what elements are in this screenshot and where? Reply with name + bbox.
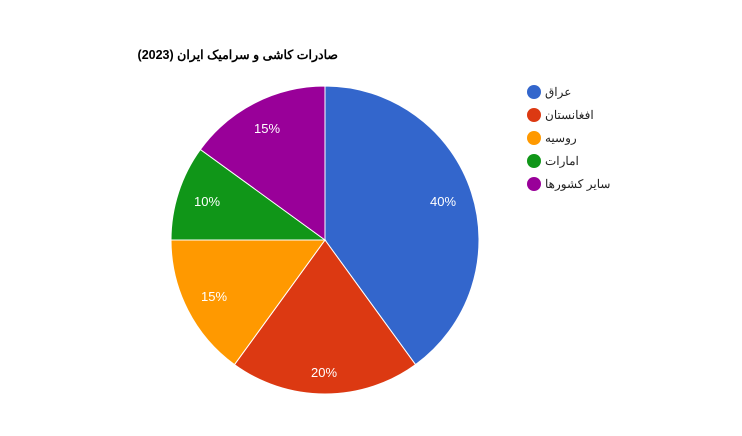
title: صادرات کاشی و سرامیک ایران (2023) [138, 48, 338, 63]
pie chart [171, 86, 479, 394]
legend item: Russia: روسیه [545, 131, 577, 145]
slice: Iraq 40% [325, 86, 479, 365]
slice labels: 40% [430, 194, 456, 209]
slice labels: 15% [254, 121, 280, 136]
legend [527, 85, 610, 191]
slice labels: 20% [311, 365, 337, 380]
legend item: Afghanistan: افغانستان [545, 108, 594, 122]
slice: others 15% [200, 86, 325, 240]
legend item: Iraq: عراق [545, 85, 571, 99]
legend item: others: سایر کشورها [545, 177, 610, 191]
slice labels [194, 121, 456, 380]
slice: Afghanistan 20% [234, 240, 416, 394]
slice: UAE 10% [171, 150, 325, 240]
slice: Russia 15% [171, 240, 325, 365]
legend item: UAE: امارات [545, 154, 579, 168]
slice labels: 15% [201, 289, 227, 304]
slice labels: 10% [194, 194, 220, 209]
